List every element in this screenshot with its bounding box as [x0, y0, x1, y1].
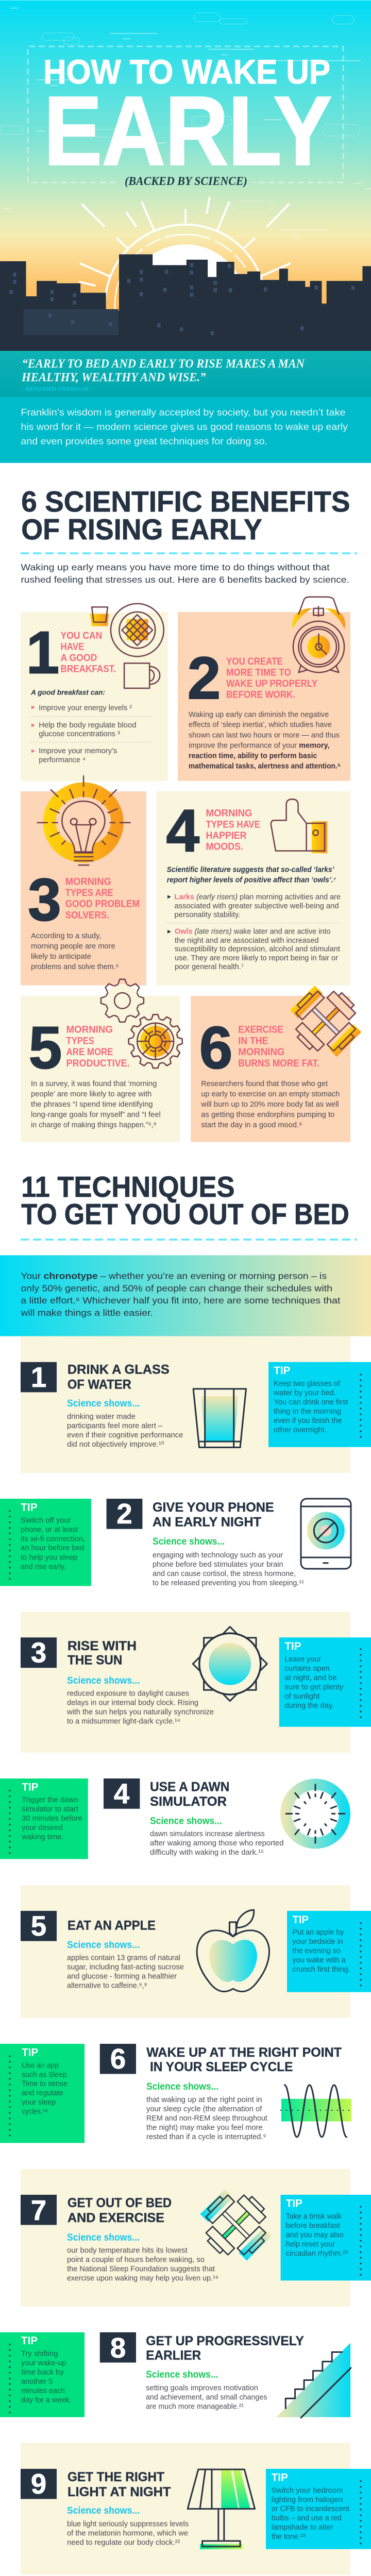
icon: lamp: [188, 2469, 255, 2549]
icon: rising sun with rays: [80, 197, 290, 385]
tip: curtains: curtains open: [284, 1665, 330, 1673]
panel: technique 3 sun: [21, 1612, 371, 1753]
tip: phone: phone, or at least: [21, 1526, 78, 1534]
panel: benefit 2 time to wake up: Waking up early can diminish the negative: [189, 710, 329, 719]
section: technique 4 dawn simulator: SIMULATOR: [150, 1794, 227, 1809]
panel: benefit 4 happier moods: report higher levels of positive affect than ‘owls’.⁷: [167, 876, 336, 885]
panel: benefit 3 problem solvers: According to a study,: [31, 932, 101, 940]
tip: sleep app: your sleep: [22, 2098, 56, 2107]
panel: benefit 4 happier moods: susceptibility to depression, alcohol and stimulant: [175, 945, 340, 954]
section: technique 8 progressively earlier: are much more manageable.²¹: [146, 2402, 244, 2411]
section: technique 8 progressively earlier: GET UP PROGRESSIVELY: [146, 2334, 304, 2348]
panel: technique 5 apple: sugar, including fast-acting sucrose: [67, 1963, 184, 1972]
panel: benefit 1 breakfast: HAVE: [61, 641, 85, 653]
panel: technique 7 exercise: 7: [31, 2195, 46, 2226]
panel: benefit 4 happier moods: Owls (late risers) wake later and are active into: [175, 928, 331, 936]
tip: sleep app: cycles.¹⁸: [22, 2108, 48, 2116]
tip: shifting wake-up time: another 5: [21, 2378, 53, 2386]
panel: benefit 3 problem solvers: GOOD PROBLEM: [65, 899, 140, 910]
title: how to wake up early: EARLY: [44, 76, 332, 185]
tip: water: water by your bed.: [273, 1389, 336, 1397]
tip: brisk walk: and you may also: [286, 2231, 344, 2239]
panel: benefit 1 breakfast: BREAKFAST.: [61, 664, 116, 675]
panel: benefit 5 productive: MORNING: [66, 1024, 113, 1036]
panel: technique 5 apple: [21, 1885, 371, 2018]
tip: dawn simulator: [0, 1778, 88, 1859]
panel: benefit 3 problem solvers: likely to anticipate: [31, 953, 91, 961]
panel: benefit 2 time to wake up: [178, 597, 350, 781]
panel: benefit 3 problem solvers: MORNING: [65, 876, 111, 887]
panel: benefit 4 happier moods: poor general health.⁷: [175, 963, 244, 971]
panel: benefit 1 breakfast: Improve your memory’s: [39, 747, 117, 755]
tip: shifting wake-up time: your wake-up: [21, 2359, 66, 2367]
section: technique 2 phone: AN EARLY NIGHT: [153, 1515, 261, 1529]
tip: shifting wake-up time: [0, 2332, 85, 2417]
tip: water: [268, 1362, 371, 1447]
panel: chronotype intro: will make things a little easier.: [20, 1308, 153, 1318]
panel: benefit 3 problem solvers: [21, 776, 146, 985]
panel: technique 1 drink water: OF WATER: [68, 1377, 131, 1392]
section: technique 8 progressively earlier: 8: [110, 2332, 126, 2364]
section: technique 4 dawn simulator: after waking among those who reported: [150, 1839, 283, 1848]
tip: phone: its wi-fi connection,: [21, 1535, 85, 1544]
tip: sleep app: and regulate: [22, 2089, 63, 2097]
panel: technique 3 sun: RISE WITH: [68, 1639, 137, 1653]
panel: benefit 2 time to wake up: shown can last two hours or more — and thus: [189, 732, 340, 740]
section: technique 2 phone: GIVE YOUR PHONE: [153, 1500, 274, 1515]
tip: dawn simulator: 30 minutes before: [22, 1815, 82, 1823]
panel: technique 1 drink water: 1: [31, 1362, 46, 1393]
text: benefits intro: [21, 562, 349, 585]
tip: apple: the evening so: [293, 1947, 341, 1955]
panel: benefit 4 happier moods: [157, 791, 350, 985]
icon: glass of water: [193, 1389, 246, 1447]
panel: benefit 4 happier moods: use. They are more likely to report being in fair or: [175, 954, 338, 962]
icon: light bulb: [38, 776, 130, 865]
icon: apple: [197, 1910, 269, 1992]
panel: technique 5 apple: Science shows...: [67, 1939, 140, 1951]
panel: benefit 1 breakfast: [21, 604, 168, 781]
panel: technique 7 exercise: Science shows...: [67, 2232, 140, 2243]
panel: franklin quote: “EARLY TO BED AND EARLY TO RISE MAKES A MAN: [22, 358, 306, 371]
panel: technique 7 exercise: [21, 2169, 371, 2307]
tip: water: TIP: [274, 1365, 290, 1377]
panel: benefit 6 exercise: 6: [199, 1014, 232, 1081]
icon: stairs: [276, 2343, 351, 2418]
tip: brisk walk: [281, 2195, 371, 2280]
panel: technique 7 exercise: exercise upon waking may help you liven up.¹⁹: [67, 2274, 218, 2282]
panel: benefit 5 productive: people’ are more likely to agree with: [31, 1090, 151, 1098]
icon: alarm clock: [292, 597, 345, 672]
panel: technique 3 sun: 3: [31, 1637, 46, 1668]
section: technique 4 dawn simulator: difficulty with waking in the dark.¹⁵: [150, 1849, 264, 1857]
panel: benefit 2 time to wake up: improve the performance of your memory,: [189, 741, 330, 750]
tip: shifting wake-up time: day for a week.: [21, 2396, 71, 2404]
panel: benefit 4 happier moods: TYPES HAVE: [206, 819, 260, 830]
panel: technique 1 drink water: drinking water made: [67, 1413, 136, 1421]
panel: technique 5 apple: 5: [31, 1910, 46, 1942]
icon: thumbs up: [271, 799, 327, 853]
panel: benefit 6 exercise: start the day in a good mood.⁹: [201, 1121, 302, 1129]
tip: water: even if you finish the: [274, 1417, 342, 1425]
tip: shifting wake-up time: minutes each: [21, 2387, 65, 2395]
panel: technique 1 drink water: Science shows...: [67, 1398, 140, 1409]
panel: technique 9 light: need to regulate our body clock.²²: [67, 2538, 180, 2547]
panel: technique 3 sun: delays in our internal body clock. Rising: [67, 1699, 198, 1707]
heading: 6 scientific benefits: 6 SCIENTIFIC BENEFITS: [21, 485, 350, 518]
tip: bulbs: Switch your bedroom: [272, 2486, 343, 2495]
panel: chronotype intro: a little effort.⁶ Whichever half you fit into, here are some techniques that: [21, 1295, 340, 1306]
tip: sleep app: Use an app: [22, 2061, 59, 2070]
panel: technique 7 exercise: AND EXERCISE: [68, 2211, 164, 2225]
tip: bulbs: lampshade to alter: [272, 2523, 333, 2532]
icon: crossed dumbbells: [290, 986, 361, 1057]
tip: bulbs: or CFB to incandescent: [272, 2505, 349, 2513]
panel: benefit 4 happier moods: associated with greater subjective well-being and: [174, 902, 339, 910]
panel: benefit 4 happier moods: the night and are associated with increased: [175, 937, 318, 945]
panel: intro text: [0, 397, 371, 463]
tip: brisk walk: TIP: [286, 2197, 302, 2209]
tip: apple: crunch first thing.: [293, 1965, 350, 1974]
tip: sleep app: TIP: [22, 2046, 38, 2058]
section: technique 8 progressively earlier: setting goals improves motivation: [146, 2384, 258, 2392]
tip: curtains: TIP: [284, 1640, 301, 1652]
panel: benefit 2 time to wake up: YOU CREATE: [226, 656, 283, 667]
tip: apple: Put an apple by: [293, 1928, 344, 1937]
panel: technique 1 drink water: DRINK A GLASS: [68, 1363, 170, 1377]
panel: technique 3 sun: THE SUN: [68, 1653, 122, 1668]
section: technique 2 phone: [0, 1498, 351, 1587]
tip: water: other overnight.: [274, 1426, 327, 1434]
panel: technique 3 sun: with the sun helps you naturally synchronize: [66, 1708, 214, 1717]
heading: 11 techniques: 11 TECHNIQUES: [21, 1171, 235, 1204]
tip: shifting wake-up time: Try shifting: [21, 2350, 58, 2358]
tip: water: You can drink one first: [274, 1398, 348, 1406]
tip: bulbs: the tone.²³: [272, 2533, 305, 2541]
panel: franklin quote: HEALTHY, WEALTHY AND WISE.”: [21, 371, 206, 384]
text: benefits intro: Waking up early means you have more time to do things without that: [21, 562, 330, 572]
panel: franklin quote: - BENJAMIN FRANKLIN ¹: [22, 386, 92, 392]
section: technique 2 phone: phone before bed stimulates your brain: [153, 1561, 283, 1569]
tip: curtains: at night, and be: [284, 1674, 336, 1682]
panel: benefit 6 exercise: EXERCISE: [238, 1024, 283, 1036]
section: technique 6 sleep cycle: IN YOUR SLEEP CYCLE: [150, 2060, 293, 2074]
panel: benefit 2 time to wake up: WAKE UP PROPERLY: [226, 678, 317, 689]
panel: chronotype intro: only 50% genetic, and 50% of people can change their schedules with: [21, 1283, 332, 1293]
icon: dumbbells: [200, 2189, 272, 2261]
panel: benefit 1 breakfast: 1: [26, 619, 59, 686]
section: technique 6 sleep cycle: 6: [110, 2043, 126, 2075]
panel: technique 9 light: [21, 2443, 371, 2575]
tip: water: Keep two glasses of: [274, 1380, 341, 1388]
section: technique 2 phone: 2: [116, 1498, 132, 1530]
panel: benefit 6 exercise: [191, 986, 361, 1142]
panel: benefit 6 exercise: Researchers found that those who get: [201, 1080, 328, 1088]
tip: water: thing in the morning: [274, 1408, 341, 1416]
panel: intro text: Franklin’s wisdom is generally accepted by society, but you needn’t take: [21, 408, 345, 418]
panel: benefit 4 happier moods: Scientific literature suggests that so-called ‘larks’: [167, 866, 334, 874]
panel: intro text: his word for it — modern science gives us good reasons to wake up early: [21, 422, 348, 432]
panel: benefit 4 happier moods: MORNING: [206, 808, 252, 819]
panel: technique 5 apple: apples contain 13 grams of natural: [67, 1954, 180, 1962]
heading: 11 techniques: [21, 1171, 349, 1231]
panel: technique 9 light: Science shows...: [67, 2505, 140, 2516]
panel: technique 5 apple: alternative to caffeine.⁶,⁸: [67, 1982, 147, 1990]
panel: benefit 5 productive: 5: [29, 1014, 62, 1081]
section: technique 8 progressively earlier: [0, 2332, 351, 2418]
panel: benefit 1 breakfast: performance ⁴: [39, 756, 86, 764]
panel: benefit 6 exercise: as getting those endorphins pumping to: [201, 1111, 334, 1119]
section: technique 4 dawn simulator: USE A DAWN: [150, 1780, 229, 1794]
tip: shifting wake-up time: time back by: [21, 2368, 64, 2377]
panel: technique 1 drink water: participants feel more alert –: [67, 1422, 163, 1430]
tip: dawn simulator: your desired: [22, 1824, 63, 1832]
section: technique 6 sleep cycle: the night) may make you feel more: [146, 2124, 263, 2132]
section: technique 8 progressively earlier: Science shows...: [146, 2369, 218, 2380]
tip: curtains: sure to get plenty: [284, 1683, 344, 1691]
tip: phone: to help you sleep: [21, 1554, 77, 1562]
tip: shifting wake-up time: TIP: [21, 2335, 38, 2347]
hero: sky and sunrise header: [0, 0, 371, 319]
panel: benefit 3 problem solvers: 3: [28, 866, 61, 933]
panel: intro text: and even provides some great techniques for doing so.: [21, 436, 267, 446]
section: technique 8 progressively earlier: EARLIER: [146, 2348, 201, 2363]
icon: gears: [101, 979, 182, 1068]
panel: benefit 2 time to wake up: reaction time, ability to perform basic: [189, 752, 317, 760]
panel: benefit 6 exercise: BURNS MORE FAT.: [238, 1058, 319, 1069]
section: technique 4 dawn simulator: dawn simulators increase alertness: [150, 1830, 265, 1838]
tip: apple: your bedside in: [293, 1938, 343, 1946]
section: technique 4 dawn simulator: Science shows...: [150, 1815, 222, 1826]
section: technique 6 sleep cycle: Science shows...: [146, 2081, 218, 2092]
tip: curtains: during the day.: [284, 1702, 334, 1710]
panel: franklin quote: [0, 351, 371, 397]
title frame: dashed rectangle: [28, 46, 343, 182]
panel: benefit 1 breakfast: Improve your energy levels ²: [39, 704, 132, 712]
tip: sleep app: [0, 2044, 85, 2143]
panel: technique 3 sun: Science shows...: [67, 1675, 140, 1686]
tip: sleep app: Time to sense: [22, 2080, 68, 2088]
panel: chronotype intro: Your chronotype – whether you’re an evening or morning person – is: [21, 1270, 327, 1281]
panel: benefit 5 productive: TYPES: [66, 1036, 94, 1047]
skyline silhouette: [0, 255, 371, 351]
panel: benefit 5 productive: ARE MORE: [66, 1046, 113, 1058]
section: technique 2 phone: and can cause cortisol, the stress hormone,: [153, 1570, 296, 1578]
panel: technique 5 apple: and glucose - forming a healthier: [67, 1973, 177, 1981]
panel: technique 7 exercise: GET OUT OF BED: [68, 2196, 172, 2210]
panel: benefit 1 breakfast: A good breakfast can:: [30, 688, 105, 697]
panel: benefit 3 problem solvers: problems and solve them.⁶: [31, 963, 119, 971]
section: technique 2 phone: to be released preventing you from sleeping.¹¹: [153, 1579, 304, 1587]
panel: technique 7 exercise: the National Sleep Foundation suggests that: [67, 2265, 215, 2273]
icon: sun: [193, 1627, 267, 1701]
panel: technique 3 sun: reduced exposure to daylight causes: [67, 1690, 189, 1698]
tip: phone: and rise early.: [21, 1563, 66, 1571]
tip: brisk walk: Take a brisk walk: [286, 2212, 342, 2221]
tip: dawn simulator: Trigger the dawn: [22, 1796, 78, 1804]
panel: technique 9 light: LIGHT AT NIGHT: [68, 2485, 171, 2499]
panel: technique 9 light: 9: [31, 2468, 46, 2500]
panel: benefit 4 happier moods: Larks (early risers) plan morning activities and are: [174, 893, 341, 902]
section: technique 4 dawn simulator: 4: [114, 1778, 130, 1809]
panel: technique 9 light: of the melatonin hormone, which we: [67, 2529, 188, 2537]
panel: technique 7 exercise: our body temperature hits its lowest: [67, 2247, 188, 2255]
panel: benefit 2 time to wake up: BEFORE WORK.: [226, 689, 295, 701]
tip: brisk walk: circadian rhythm.²⁰: [286, 2249, 348, 2258]
panel: benefit 4 happier moods: MOODS.: [206, 841, 243, 853]
heading: 6 scientific benefits: OF RISING EARLY: [21, 513, 262, 546]
icon: dawn light ring: [280, 1778, 350, 1849]
subtitle: backed by science: (BACKED BY SCIENCE): [125, 175, 247, 188]
panel: benefit 1 breakfast: A GOOD: [61, 652, 97, 664]
tip: sleep app: such as Sleep: [22, 2071, 67, 2079]
tip: dawn simulator: waking time.: [21, 1833, 64, 1841]
section: technique 6 sleep cycle: your sleep cycle (the alternation of: [146, 2105, 262, 2113]
panel: benefit 2 time to wake up: MORE TIME TO: [226, 667, 291, 679]
panel: benefit 6 exercise: MORNING: [238, 1046, 284, 1058]
tip: phone: [0, 1499, 91, 1586]
panel: benefit 5 productive: PRODUCTIVE.: [66, 1058, 130, 1069]
panel: benefit 4 happier moods: 4: [166, 798, 199, 865]
icon: breakfast plate, juice and mug: [90, 604, 164, 688]
panel: benefit 4 happier moods: HAPPIER: [206, 830, 246, 841]
tip: bulbs: TIP: [272, 2471, 288, 2483]
section: technique 4 dawn simulator: [0, 1778, 350, 1859]
tip: phone: Switch off your: [21, 1517, 71, 1525]
panel: technique 7 exercise: point a couple of hours before waking, so: [67, 2256, 205, 2264]
tip: curtains: Leave your: [284, 1655, 321, 1664]
tip: curtains: [279, 1637, 371, 1727]
panel: technique 1 drink water: even if their cognitive performance: [67, 1431, 183, 1439]
panel: technique 1 drink water: [21, 1336, 371, 1473]
tip: dawn simulator: TIP: [22, 1781, 38, 1793]
panel: benefit 1 breakfast: glucose concentrations ³: [39, 730, 120, 738]
panel: chronotype intro: [0, 1255, 371, 1336]
panel: benefit 3 problem solvers: SOLVERS.: [65, 909, 109, 921]
section: technique 6 sleep cycle: WAKE UP AT THE RIGHT POINT: [146, 2045, 342, 2060]
panel: technique 1 drink water: did not objectively improve.¹⁰: [67, 1440, 164, 1449]
panel: benefit 5 productive: [21, 979, 182, 1142]
tip: phone: an hour before bed: [21, 1544, 85, 1552]
text: benefits intro: rushed feeling that stresses us out. Here are 6 benefits backed by science.: [21, 574, 349, 585]
heading: 6 scientific benefits: [21, 485, 350, 546]
tip: apple: TIP: [293, 1914, 309, 1926]
panel: benefit 5 productive: In a survey, it was found that ‘morning: [31, 1080, 157, 1088]
tip: bulbs: bulbs – and use a red: [272, 2514, 342, 2522]
panel: benefit 2 time to wake up: effects of ‘sleep inertia’, which studies have: [189, 721, 332, 729]
panel: benefit 6 exercise: will burn up to 20% more body fat as well: [200, 1100, 339, 1109]
panel: benefit 5 productive: in charge of making things happen.”⁶,⁸: [31, 1121, 157, 1129]
panel: benefit 5 productive: the phrases “I spend time identifying: [31, 1100, 153, 1109]
panel: technique 5 apple: EAT AN APPLE: [68, 1918, 156, 1933]
tip: phone: TIP: [21, 1502, 37, 1514]
icon: sleep cycle wave: [281, 2085, 351, 2137]
panel: benefit 3 problem solvers: morning people are more: [31, 942, 115, 951]
panel: benefit 4 happier moods: personality stability.: [174, 911, 240, 919]
section: technique 6 sleep cycle: REM and non-REM sleep throughout: [146, 2114, 267, 2123]
panel: benefit 3 problem solvers: TYPES ARE: [65, 887, 113, 899]
section: technique 2 phone: Science shows...: [153, 1536, 225, 1547]
section: technique 8 progressively earlier: and achievement, and small changes: [146, 2393, 267, 2401]
panel: technique 9 light: GET THE RIGHT: [68, 2470, 164, 2484]
section: technique 6 sleep cycle: that waking up at the right point in: [146, 2096, 262, 2104]
panel: benefit 6 exercise: up early to exercise on an empty stomach: [201, 1090, 340, 1098]
icon: phone with no-signal sign: [301, 1499, 351, 1569]
tip: apple: [287, 1911, 371, 1992]
tip: curtains: of sunlight: [284, 1692, 319, 1701]
tip: bulbs: [266, 2469, 371, 2549]
panel: benefit 2 time to wake up: 2: [188, 645, 221, 711]
tip: brisk walk: help reset your: [286, 2240, 335, 2248]
panel: technique 3 sun: to a midsummer light-dark cycle.¹⁴: [67, 1718, 180, 1726]
section: technique 2 phone: engaging with technology such as your: [153, 1551, 283, 1560]
title: how to wake up early: HOW TO WAKE UP: [43, 53, 330, 91]
panel: benefit 1 breakfast: YOU CAN: [61, 630, 102, 641]
section: technique 6 sleep cycle: rested than if a cycle is interrupted.⁹: [146, 2133, 266, 2141]
panel: benefit 5 productive: long-range goals for myself” and “I feel: [31, 1111, 161, 1119]
panel: benefit 6 exercise: IN THE: [238, 1036, 268, 1047]
tip: brisk walk: before breakfast: [286, 2222, 340, 2230]
tip: dawn simulator: simulator to start: [22, 1805, 78, 1814]
section: technique 6 sleep cycle: [0, 2043, 351, 2143]
panel: benefit 2 time to wake up: mathematical tasks, alertness and attention.⁵: [189, 762, 341, 771]
tip: bulbs: lighting from halogen: [272, 2496, 343, 2504]
panel: technique 9 light: blue light seriously suppresses levels: [67, 2520, 189, 2528]
tip: apple: you wake with a: [293, 1956, 346, 1964]
panel: benefit 1 breakfast: Help the body regulate blood: [39, 721, 136, 730]
